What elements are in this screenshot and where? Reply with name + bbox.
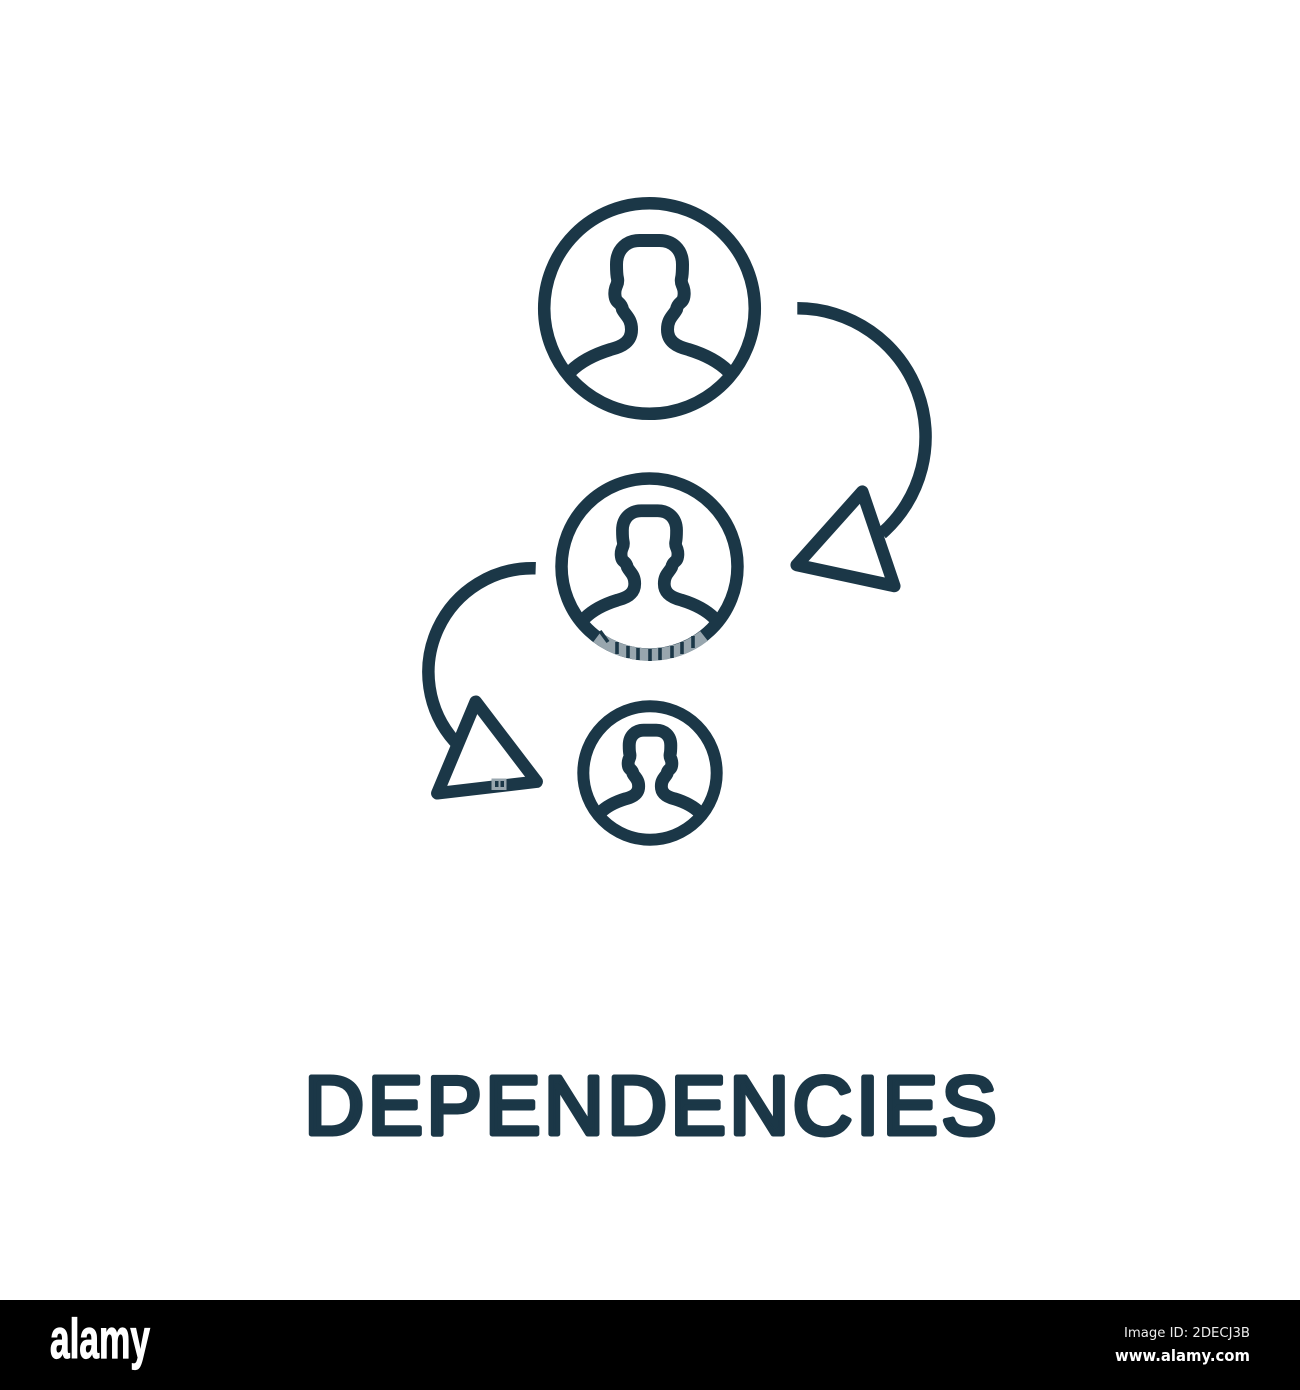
watermark fragment on arrowhead — [492, 778, 506, 790]
watermark strip on middle circle — [597, 631, 704, 661]
icon: middle person in circle — [562, 478, 738, 654]
icon: top person in circle — [544, 203, 755, 414]
title: DEPENDENCIES — [304, 1060, 996, 1152]
footer logo: alamy — [50, 1307, 150, 1370]
footer url: www.alamy.com — [1115, 1346, 1250, 1365]
arrow: top circle to middle — [797, 308, 926, 586]
icon: bottom person in circle — [583, 706, 717, 840]
footer image id: Image ID: 2DECJ3B — [1124, 1325, 1250, 1341]
arrow: middle circle to bottom — [428, 568, 537, 793]
watermark footer bar — [0, 1300, 1300, 1390]
